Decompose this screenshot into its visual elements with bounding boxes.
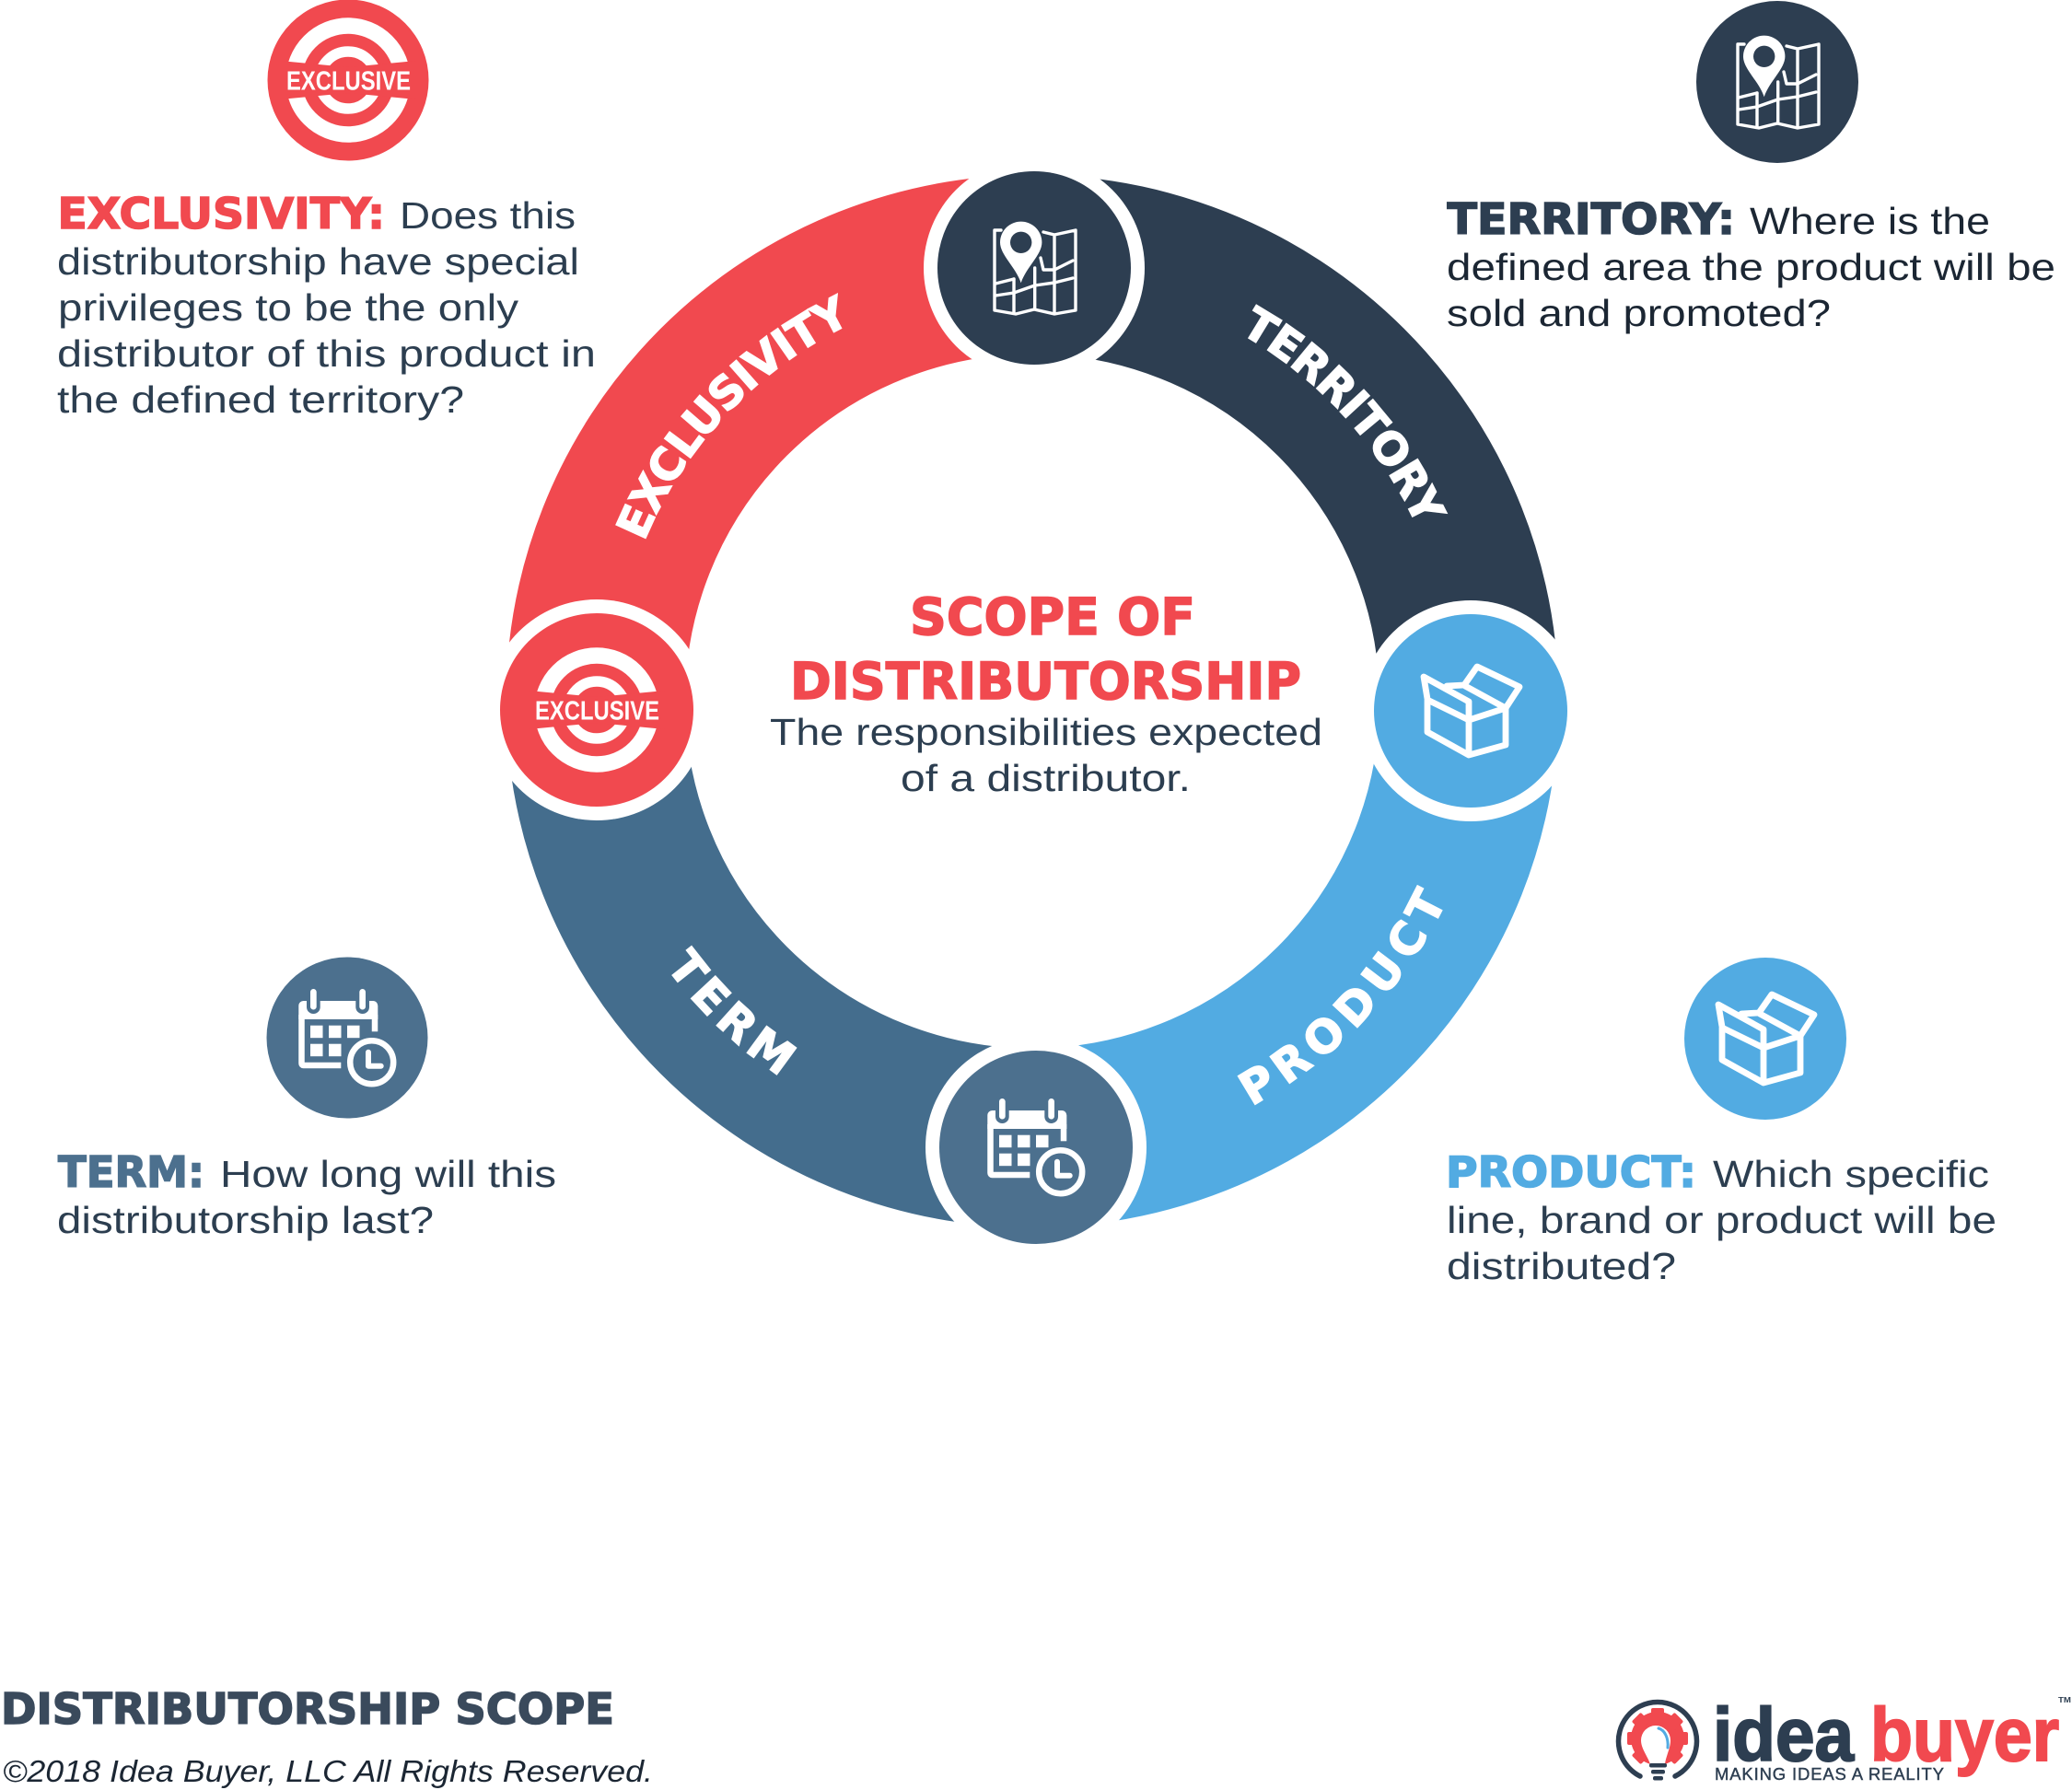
text: territory description: Where is the <box>1750 200 1990 242</box>
logo wordmark: buyer <box>1870 1693 2059 1777</box>
title: scope of distributorship <box>790 587 1301 711</box>
icon: exclusive badge <box>267 0 429 160</box>
ring label: territory: TERRITORY <box>1248 304 1448 517</box>
text: exclusivity description: distributorship have special <box>57 240 579 283</box>
icon: map with pin <box>1696 1 1858 163</box>
logo wordmark <box>1713 1693 2071 1784</box>
panel: exclusivity callout <box>57 0 596 421</box>
text: territory description <box>1447 194 2055 334</box>
panel: territory callout <box>1447 1 2055 334</box>
ring label: term: TERM <box>671 945 797 1075</box>
ring label: exclusivity: EXCLUSIVITY <box>615 293 842 540</box>
text: product description <box>1446 1147 1996 1287</box>
title: scope of distributorship: SCOPE OF <box>910 587 1195 646</box>
text: product description: PRODUCT: <box>1446 1147 1696 1197</box>
text: product description: Which specific <box>1713 1153 1989 1195</box>
title: scope of distributorship: DISTRIBUTORSHIP <box>790 652 1301 711</box>
ring label: product: PRODUCT <box>1238 884 1443 1105</box>
icon: open box <box>1684 958 1846 1120</box>
text: exclusivity description: privileges to be the only <box>58 286 519 329</box>
node: exclusive badge icon <box>486 599 707 820</box>
text: exclusivity description <box>57 189 596 421</box>
text: territory description: defined area the product will be <box>1447 246 2055 288</box>
subtitle: The responsibilities expected <box>770 711 1322 753</box>
logo wordmark: idea <box>1713 1693 1855 1777</box>
text: term description: TERM: <box>58 1147 204 1197</box>
logo icon: gear and bulb <box>1619 1702 1697 1781</box>
subtitle <box>770 711 1322 799</box>
panel: term callout <box>57 958 556 1241</box>
ring segment: territory <box>1032 264 1469 702</box>
text: exclusivity description: distributor of this product in <box>57 332 596 375</box>
node: territory map icon <box>924 157 1145 378</box>
panel: product callout <box>1446 958 1996 1287</box>
node: exclusive badge icon: EXCLUSIVE <box>535 696 659 726</box>
text: product description: line, brand or product will be <box>1447 1199 1996 1241</box>
ring segment: exclusivity <box>596 264 1032 702</box>
text: territory description: TERRITORY: <box>1448 194 1735 244</box>
text: term description <box>57 1147 556 1241</box>
panel: central ring diagram <box>500 171 1567 1244</box>
text: exclusivity description: the defined territory? <box>57 378 464 421</box>
subtitle: of a distributor. <box>901 757 1191 799</box>
node: product box icon <box>1360 600 1581 821</box>
footer heading: DISTRIBUTORSHIP SCOPE <box>1 1684 614 1734</box>
copyright: ©2018 Idea Buyer, LLC All Rights Reserved. <box>3 1754 653 1788</box>
logo wordmark: TM <box>2058 1695 2071 1704</box>
node: term calendar icon <box>925 1037 1147 1258</box>
text: term description: distributorship last? <box>57 1199 434 1241</box>
ring segment: term <box>596 702 1032 1138</box>
icon: exclusive badge: EXCLUSIVE <box>286 66 411 96</box>
text: territory description: sold and promoted? <box>1447 292 1831 334</box>
text: exclusivity description: EXCLUSIVITY: <box>57 189 385 238</box>
icon: calendar with clock <box>267 958 427 1118</box>
text: product description: distributed? <box>1447 1245 1676 1287</box>
ring segment: product <box>1032 702 1469 1138</box>
logo: idea buyer <box>1619 1693 2071 1784</box>
logo wordmark: MAKING IDEAS A REALITY <box>1715 1764 1944 1784</box>
text: exclusivity description: Does this <box>400 194 576 237</box>
text: term description: How long will this <box>220 1153 556 1195</box>
